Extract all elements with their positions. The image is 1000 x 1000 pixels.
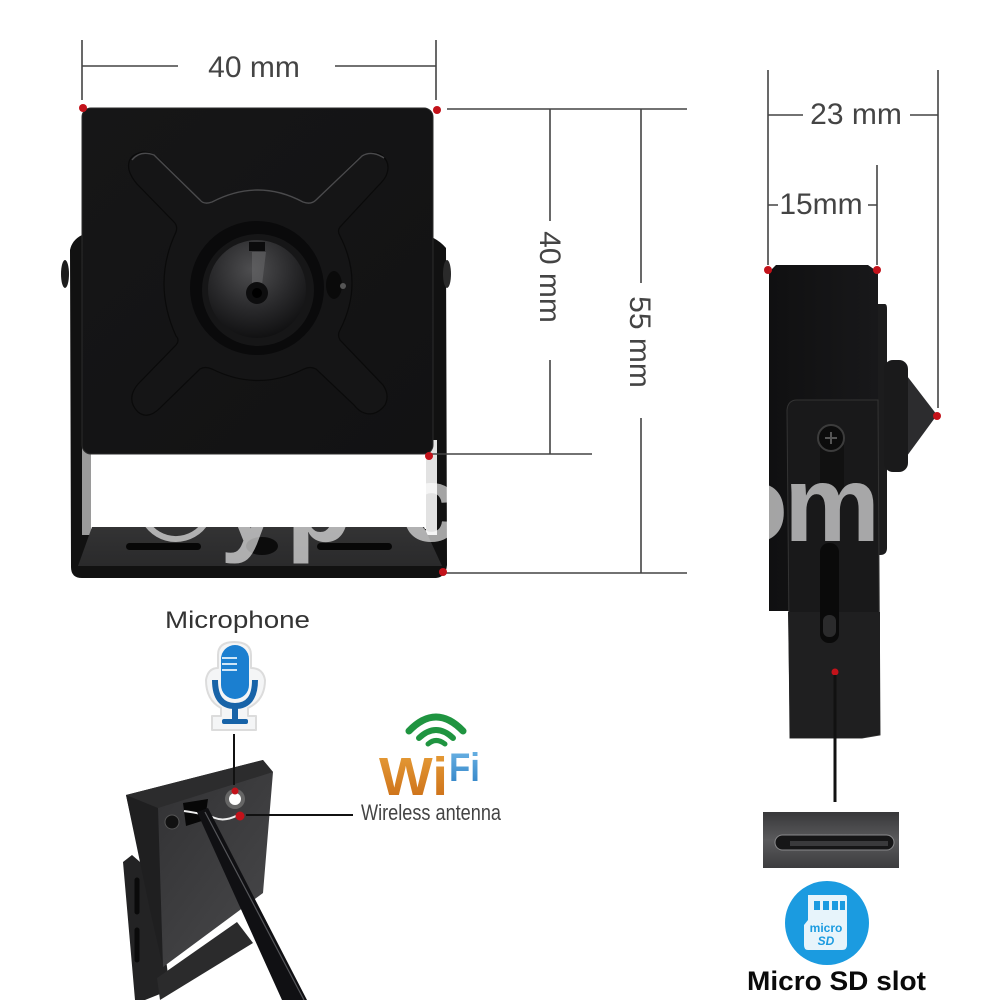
front view camera <box>61 108 451 578</box>
dimension label: height 55 mm: 55 mm <box>623 296 656 388</box>
icon: micro SD card: micro <box>810 921 842 935</box>
side bracket <box>787 400 880 738</box>
rear view camera <box>123 760 307 1000</box>
rear body <box>126 760 273 967</box>
micro SD slot label: Micro SD slot <box>747 966 926 996</box>
cross-shaped embossing <box>129 152 388 415</box>
side lens <box>884 360 937 472</box>
icon: microphone <box>206 642 265 730</box>
pinhole lens <box>190 221 324 355</box>
side mounting ear <box>878 304 887 555</box>
side view back body <box>769 265 878 611</box>
screw <box>326 271 346 299</box>
wifi word: blue: Fi <box>449 746 480 790</box>
dimension label: height 40 mm: 40 mm <box>533 231 566 323</box>
micro SD slot photo <box>763 812 899 868</box>
emboss highlight <box>132 153 384 203</box>
bracket slots <box>134 880 140 960</box>
rear bracket ear <box>123 855 170 1000</box>
watermark: ©ypcom <box>136 443 880 564</box>
wifi arcs <box>409 717 463 744</box>
red measurement markers <box>79 104 941 820</box>
black antenna cable <box>197 808 307 1000</box>
wireless antenna label: Wireless antenna <box>361 800 502 825</box>
dimension label: depth 23 mm: 23 mm <box>810 98 902 131</box>
microphone hole <box>225 789 245 809</box>
antenna leader line <box>246 814 353 816</box>
rear bracket plate <box>157 922 253 1000</box>
dimension label: width 40 mm: 40 mm <box>208 51 300 84</box>
antenna wire <box>184 811 238 819</box>
microphone label: Microphone <box>165 607 310 634</box>
cable port <box>183 799 208 826</box>
bracket <box>61 232 451 578</box>
icon: WiFi logo <box>379 717 480 807</box>
microphone leader line <box>233 734 235 785</box>
icon: micro SD card <box>785 881 869 965</box>
slot <box>818 425 844 643</box>
SD leader line <box>834 675 836 802</box>
dimension label: depth 15mm: 15mm <box>779 188 863 221</box>
wifi word: orange: Wi <box>379 747 448 807</box>
camera body <box>82 108 433 454</box>
side view camera <box>769 265 937 738</box>
icon: micro SD card: SD <box>818 934 835 948</box>
dimension lines <box>82 40 938 573</box>
